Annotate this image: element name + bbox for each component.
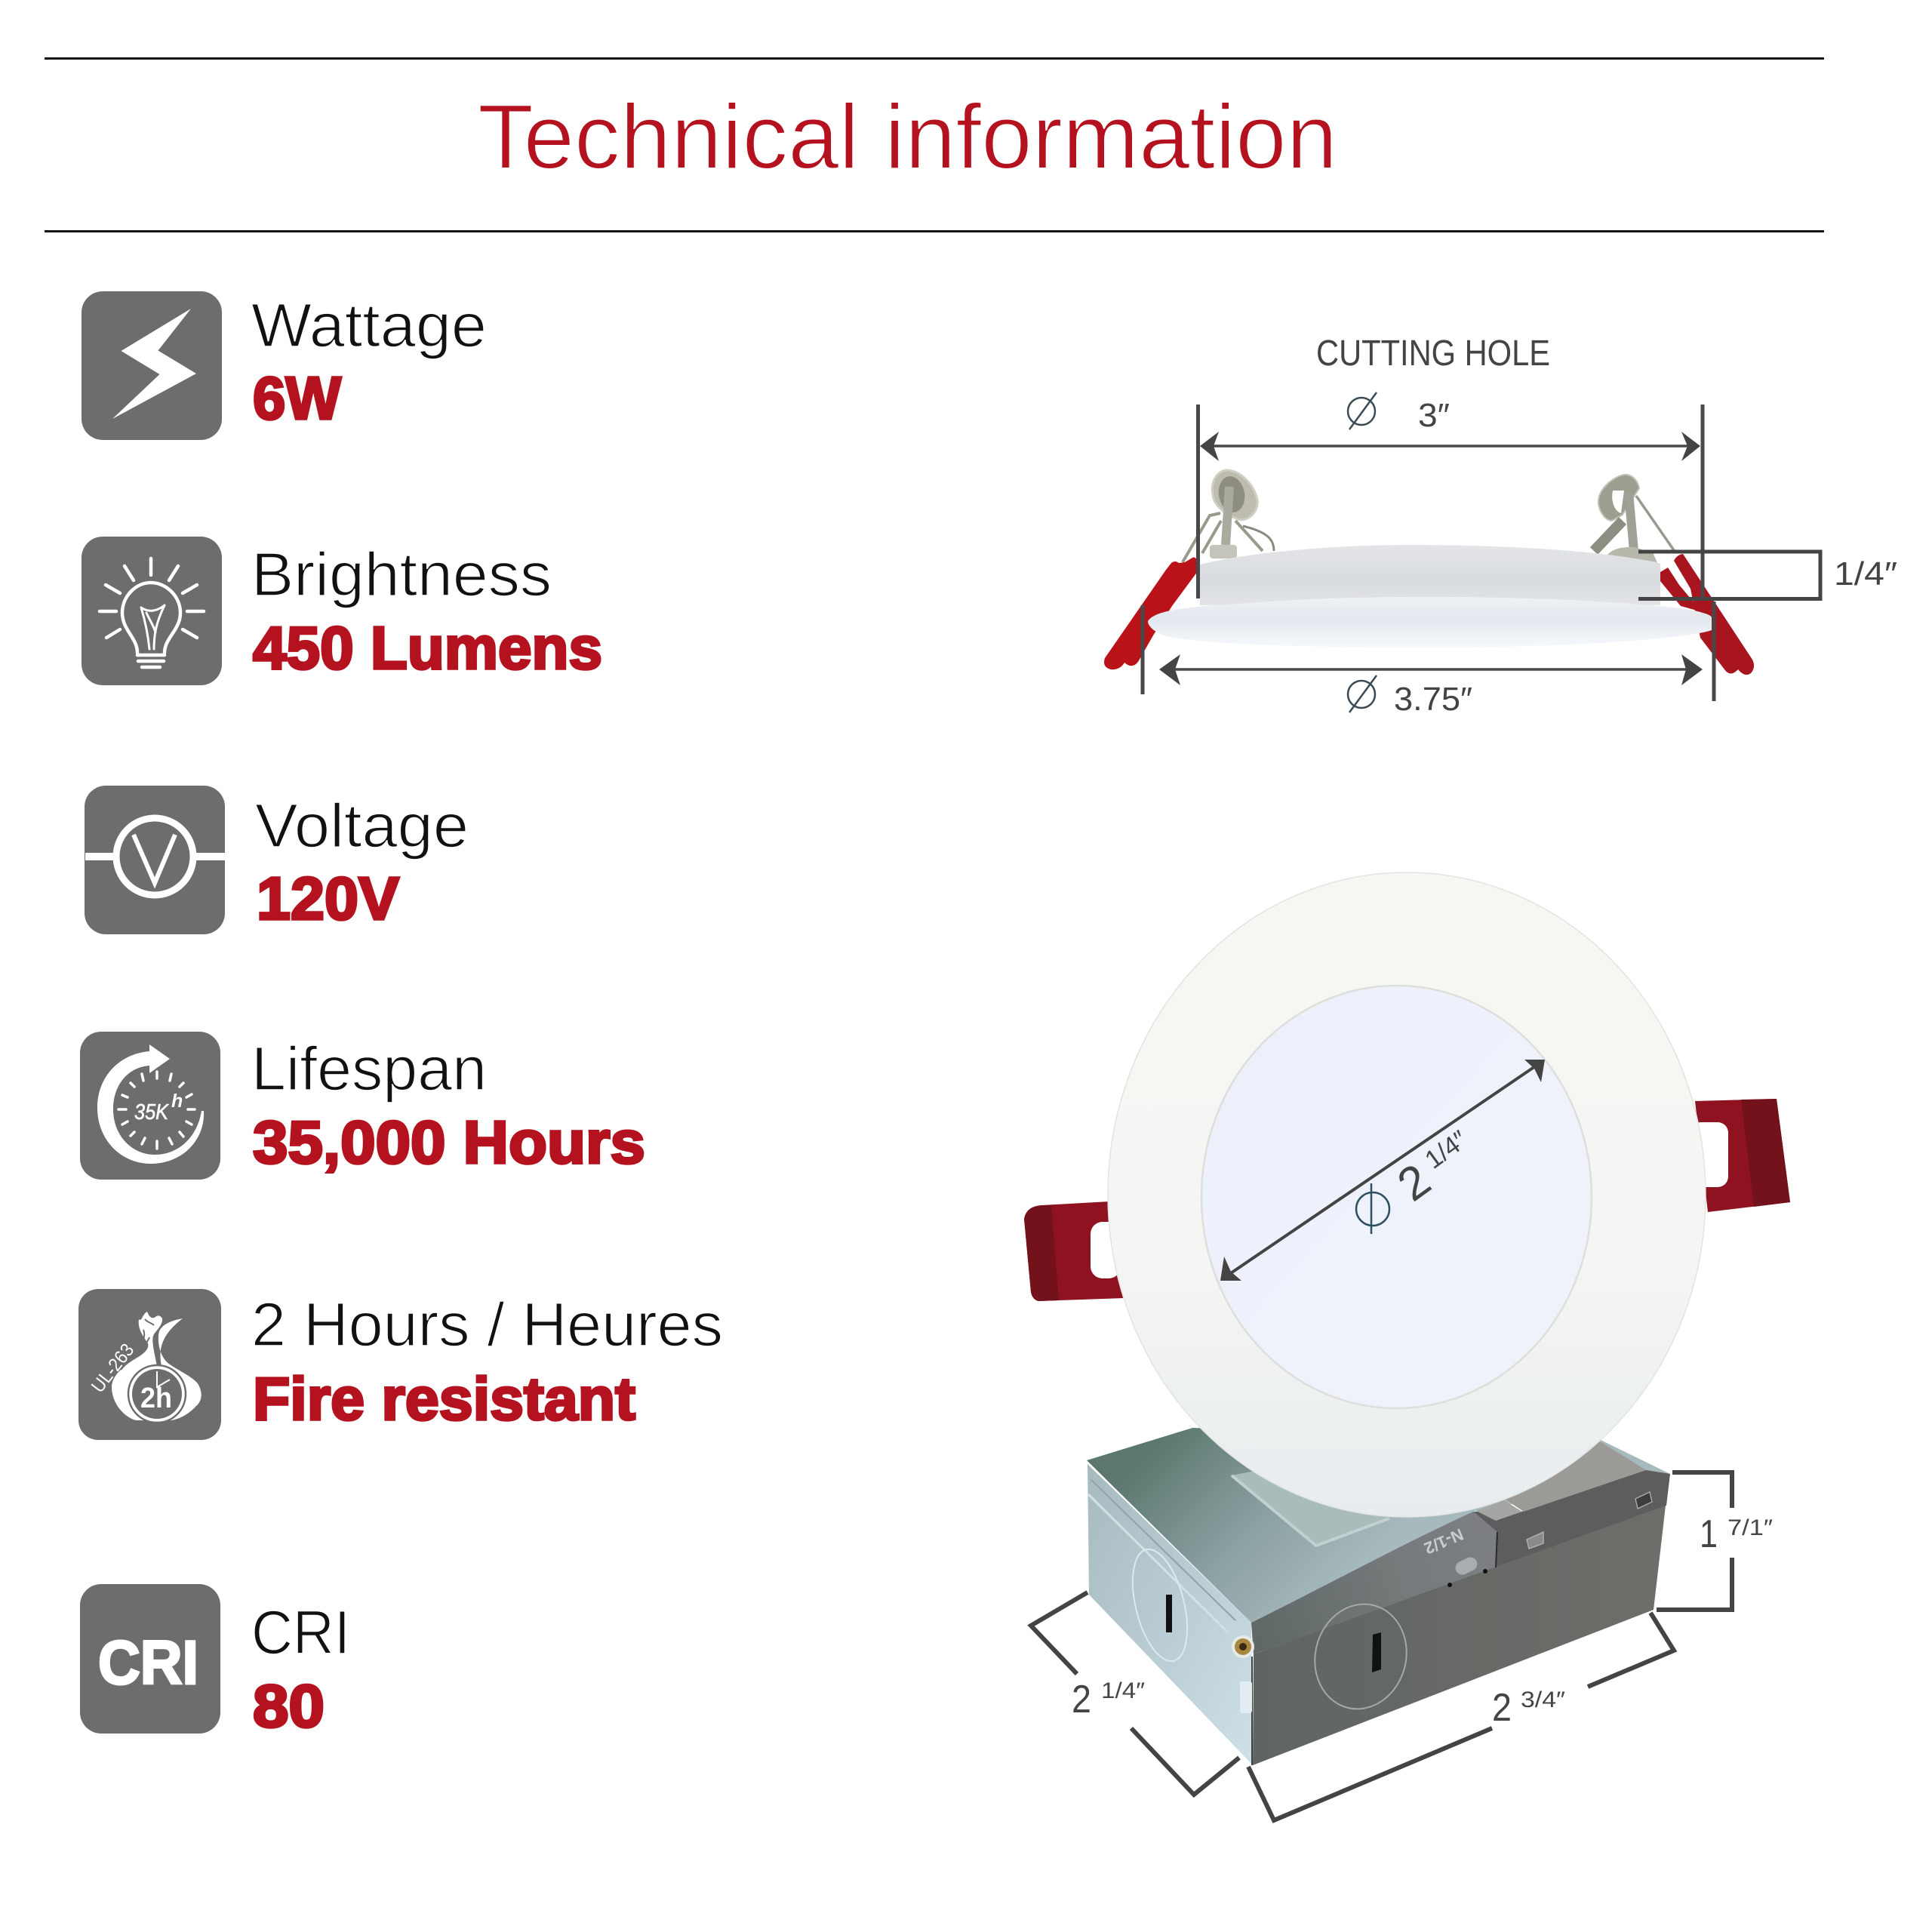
label: CRI: CRI	[251, 1598, 350, 1667]
spec: lifespan	[80, 1032, 645, 1180]
box: front lip	[1251, 1512, 1497, 1654]
value: 80: 80	[253, 1672, 325, 1740]
value: 6W: 6W	[253, 365, 341, 432]
dimension: box width	[1248, 1613, 1674, 1820]
spec: voltage	[85, 786, 469, 934]
dimension: thickness	[1638, 552, 1897, 599]
side view: fixture body	[1200, 545, 1660, 605]
box: front face	[1253, 1506, 1666, 1765]
dimension: cutting hole width	[1198, 334, 1703, 600]
box: brass screw	[1232, 1635, 1254, 1658]
title: Technical information	[478, 85, 1337, 188]
dimension: cutting hole width: 3″	[1418, 397, 1450, 434]
box: stamped mark: N-1/2	[1422, 1524, 1466, 1558]
icon: CRI badge	[80, 1584, 220, 1734]
box: knockouts	[1123, 1544, 1418, 1719]
side view: red clips	[1104, 554, 1754, 675]
dimension: box width: 3/4″	[1521, 1687, 1565, 1712]
dimension: box height: 7/1″	[1727, 1515, 1773, 1540]
icon: lifespan dial	[80, 1032, 220, 1180]
box: left face	[1088, 1464, 1253, 1765]
label: voltage: Voltage	[255, 792, 469, 860]
spec: CRI	[80, 1584, 350, 1740]
dimension: trim diameter: 3.75″	[1394, 681, 1472, 718]
icon: CRI badge: CRI	[98, 1629, 198, 1697]
value: 450 Lumens: 450 Lumens	[253, 614, 602, 681]
header rules	[45, 57, 1824, 232]
dimension: cutting hole width: CUTTING HOLE	[1316, 334, 1550, 374]
dimension: box depth: 1/4″	[1101, 1678, 1145, 1703]
red mounting tab: left	[1024, 1201, 1124, 1301]
dimension: aperture	[1220, 1060, 1545, 1281]
spec: fire rating	[78, 1289, 723, 1440]
light panel	[1201, 986, 1592, 1408]
icon: fire resistant clock	[78, 1289, 221, 1440]
label: lifespan: Lifespan	[251, 1035, 487, 1103]
icon: fire resistant clock: 2h	[140, 1383, 172, 1414]
trim ring	[1108, 872, 1706, 1517]
spec: brightness	[82, 537, 602, 685]
side view diagram	[1104, 334, 1897, 718]
box: right lip	[1473, 1470, 1670, 1567]
dimension: box depth: 2	[1072, 1678, 1091, 1721]
red mounting tab: right	[1690, 1099, 1790, 1212]
box: light grey tab	[1506, 1441, 1646, 1512]
box: clear plate	[1232, 1457, 1389, 1546]
dimension: box depth	[1031, 1592, 1239, 1795]
icon: voltmeter symbol	[85, 786, 225, 934]
front view fixture	[1024, 872, 1790, 1517]
label: wattage: Wattage	[251, 291, 487, 360]
icon: fire resistant clock: UL-263	[88, 1340, 138, 1397]
value: 120V: 120V	[257, 865, 399, 932]
value: 35,000 Hours: 35,000 Hours	[253, 1109, 645, 1176]
dimension: box height: 1	[1700, 1512, 1718, 1556]
label: brightness: Brightness	[251, 540, 552, 609]
box: left face flange	[1088, 1479, 1252, 1765]
dimension: thickness: 1/4″	[1834, 555, 1897, 592]
dimension: aperture: 1/4″	[1420, 1125, 1473, 1174]
side view: mounting springs	[1183, 470, 1675, 565]
box: clip	[1476, 1500, 1522, 1521]
icon: lightning bolt	[82, 291, 222, 440]
box: top face	[1087, 1428, 1670, 1623]
dimension: aperture: 2	[1389, 1154, 1440, 1211]
value: fire resistant: Fire resistant	[253, 1365, 635, 1432]
junction box photo	[1087, 1428, 1670, 1765]
dimension: trim diameter	[1143, 601, 1714, 718]
spec: wattage	[82, 291, 487, 440]
box: lip details	[1447, 1492, 1652, 1587]
box: seam	[1496, 1532, 1497, 1567]
icon: light bulb	[82, 537, 222, 685]
dimension: box width: 2	[1492, 1686, 1512, 1730]
label: 2 hours: 2 Hours / Heures	[251, 1291, 723, 1359]
side view: trim disc	[1148, 597, 1712, 648]
icon: lifespan dial: h	[171, 1091, 183, 1112]
dimension: box height	[1657, 1472, 1773, 1610]
icon: lifespan dial: 35K	[134, 1100, 169, 1124]
